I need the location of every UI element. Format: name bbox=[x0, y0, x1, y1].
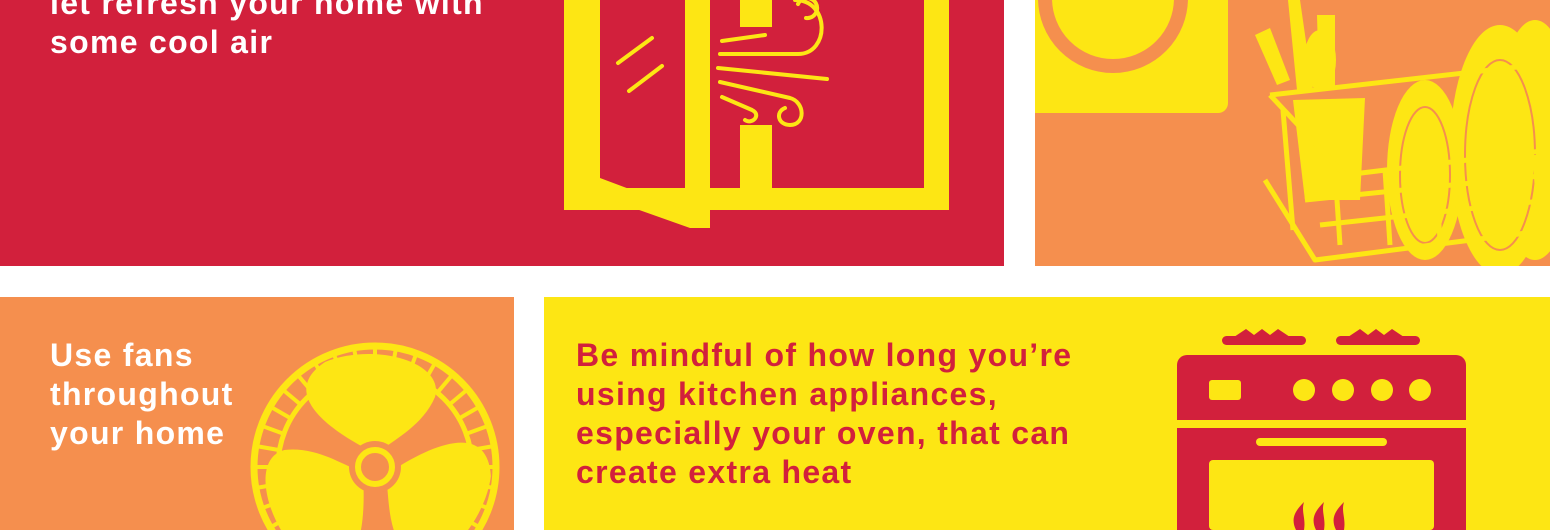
text: kitchen appliances bbox=[576, 337, 1072, 490]
text: kitchen appliances: Be mindful of how long you’re bbox=[576, 337, 1072, 373]
panel: kitchen appliances bbox=[544, 297, 1550, 530]
text: use fans bbox=[50, 337, 234, 451]
icon: oven bbox=[1177, 329, 1466, 530]
panel: dish rack bbox=[1035, 0, 1550, 266]
text: use fans: your home bbox=[50, 415, 225, 451]
icon: open window with breeze bbox=[564, 0, 949, 228]
text: use fans: Use fans bbox=[50, 337, 194, 373]
text: kitchen appliances: especially your oven, that can bbox=[576, 415, 1070, 451]
text: use fans: throughout bbox=[50, 376, 234, 412]
panel: fans bbox=[0, 297, 514, 530]
icon: dish rack with plates and cutlery bbox=[1035, 0, 1550, 266]
text: refresh home bbox=[50, 0, 484, 60]
panel: open window bbox=[0, 0, 1004, 266]
text: kitchen appliances: create extra heat bbox=[576, 454, 852, 490]
icon: fan bbox=[250, 342, 500, 530]
text: kitchen appliances: using kitchen appliances, bbox=[576, 376, 998, 412]
text: refresh home: some cool air bbox=[50, 24, 273, 60]
